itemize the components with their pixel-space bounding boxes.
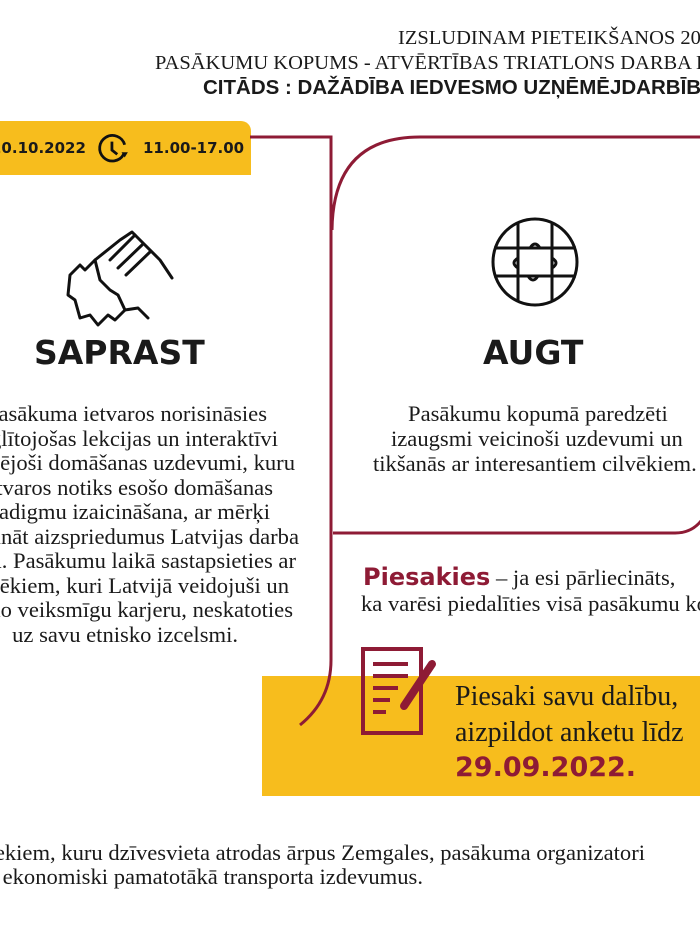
panel: saprast <box>0 230 299 647</box>
panel: saprast: SAPRAST <box>34 333 205 372</box>
panel: augt: izaugsmi veicinoši uzdevumi un <box>391 426 683 451</box>
callout: piesakies <box>361 563 700 616</box>
callout: piesakies: Piesakies – ja esi pārliecināts, <box>363 563 675 591</box>
yellow registration box <box>262 676 700 796</box>
panel: augt: AUGT <box>483 333 583 372</box>
footer note <box>0 840 645 889</box>
icon: clock <box>98 134 128 162</box>
icon: hands puzzle <box>66 230 174 327</box>
icon: puzzle globe <box>492 218 578 306</box>
yellow registration box: 29.09.2022. <box>455 752 636 783</box>
header text <box>155 26 700 99</box>
date tab: 11.00-17.00 <box>143 139 244 157</box>
yellow registration box: aizpildot anketu līdz <box>455 717 684 748</box>
date tab <box>0 121 251 175</box>
panel: augt: tikšanās ar interesantiem cilvēkiem. <box>373 451 697 476</box>
icon: form with pen <box>361 647 436 735</box>
yellow registration box: Piesaki savu dalību, <box>455 681 678 712</box>
panel: augt: Pasākumu kopumā paredzēti <box>408 401 668 426</box>
panel: saprast: uz savu etnisko izcelsmi. <box>12 622 238 647</box>
panel: augt <box>373 218 697 476</box>
